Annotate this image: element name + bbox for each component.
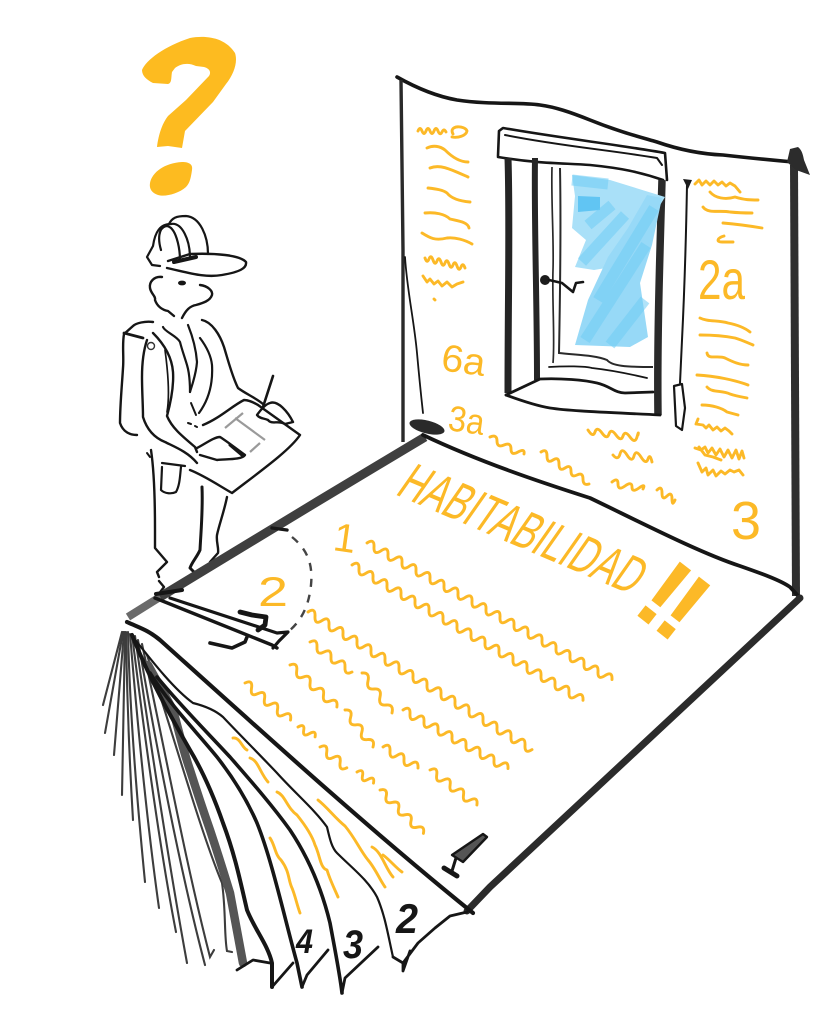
text block: label 2a: 2a [698, 248, 746, 311]
text block: label 3a and wall note: 3a [446, 397, 488, 443]
hands and pen [197, 376, 293, 460]
wall edges [397, 77, 810, 596]
text block: item 1: 1 [331, 515, 359, 562]
page edges [127, 435, 800, 913]
panel: fanned book pages [103, 632, 467, 993]
title: exclamation marks: !! [616, 539, 724, 657]
icon: question mark [142, 37, 236, 196]
panel: wall with window [397, 77, 810, 596]
jagged page bottoms [237, 960, 270, 970]
page number 4: 4 [295, 923, 313, 961]
folded page corner: 2 [258, 568, 288, 615]
folded page corner [155, 528, 311, 648]
title: habitabilidad: HABITABILIDAD [387, 453, 660, 605]
text block: label 6a: 6a [439, 337, 489, 385]
page curves [132, 635, 467, 993]
text block: left wall notes [418, 127, 472, 300]
text block: right wall notes [695, 180, 762, 476]
window glass [572, 175, 665, 347]
text block: floor page notes [245, 541, 612, 833]
body and backpack [120, 320, 263, 463]
figure: inspector with hard hat holding a plan [120, 216, 300, 595]
panel: open book page [127, 435, 800, 913]
page number 3: 3 [343, 923, 363, 967]
clipboard plan [190, 400, 300, 493]
blind cord [674, 179, 692, 430]
thin fan lines [103, 632, 232, 965]
face [150, 277, 212, 318]
text block: label 3a and wall note [446, 397, 675, 503]
text block: label 3: 3 [731, 491, 761, 551]
trousers and pocket [147, 450, 227, 595]
thick page stack [148, 665, 243, 963]
icon: page marker 1 [444, 834, 487, 876]
page number 2: 2 [395, 895, 418, 942]
window [498, 128, 667, 415]
orange page notes [233, 738, 402, 913]
hard hat [147, 216, 246, 276]
